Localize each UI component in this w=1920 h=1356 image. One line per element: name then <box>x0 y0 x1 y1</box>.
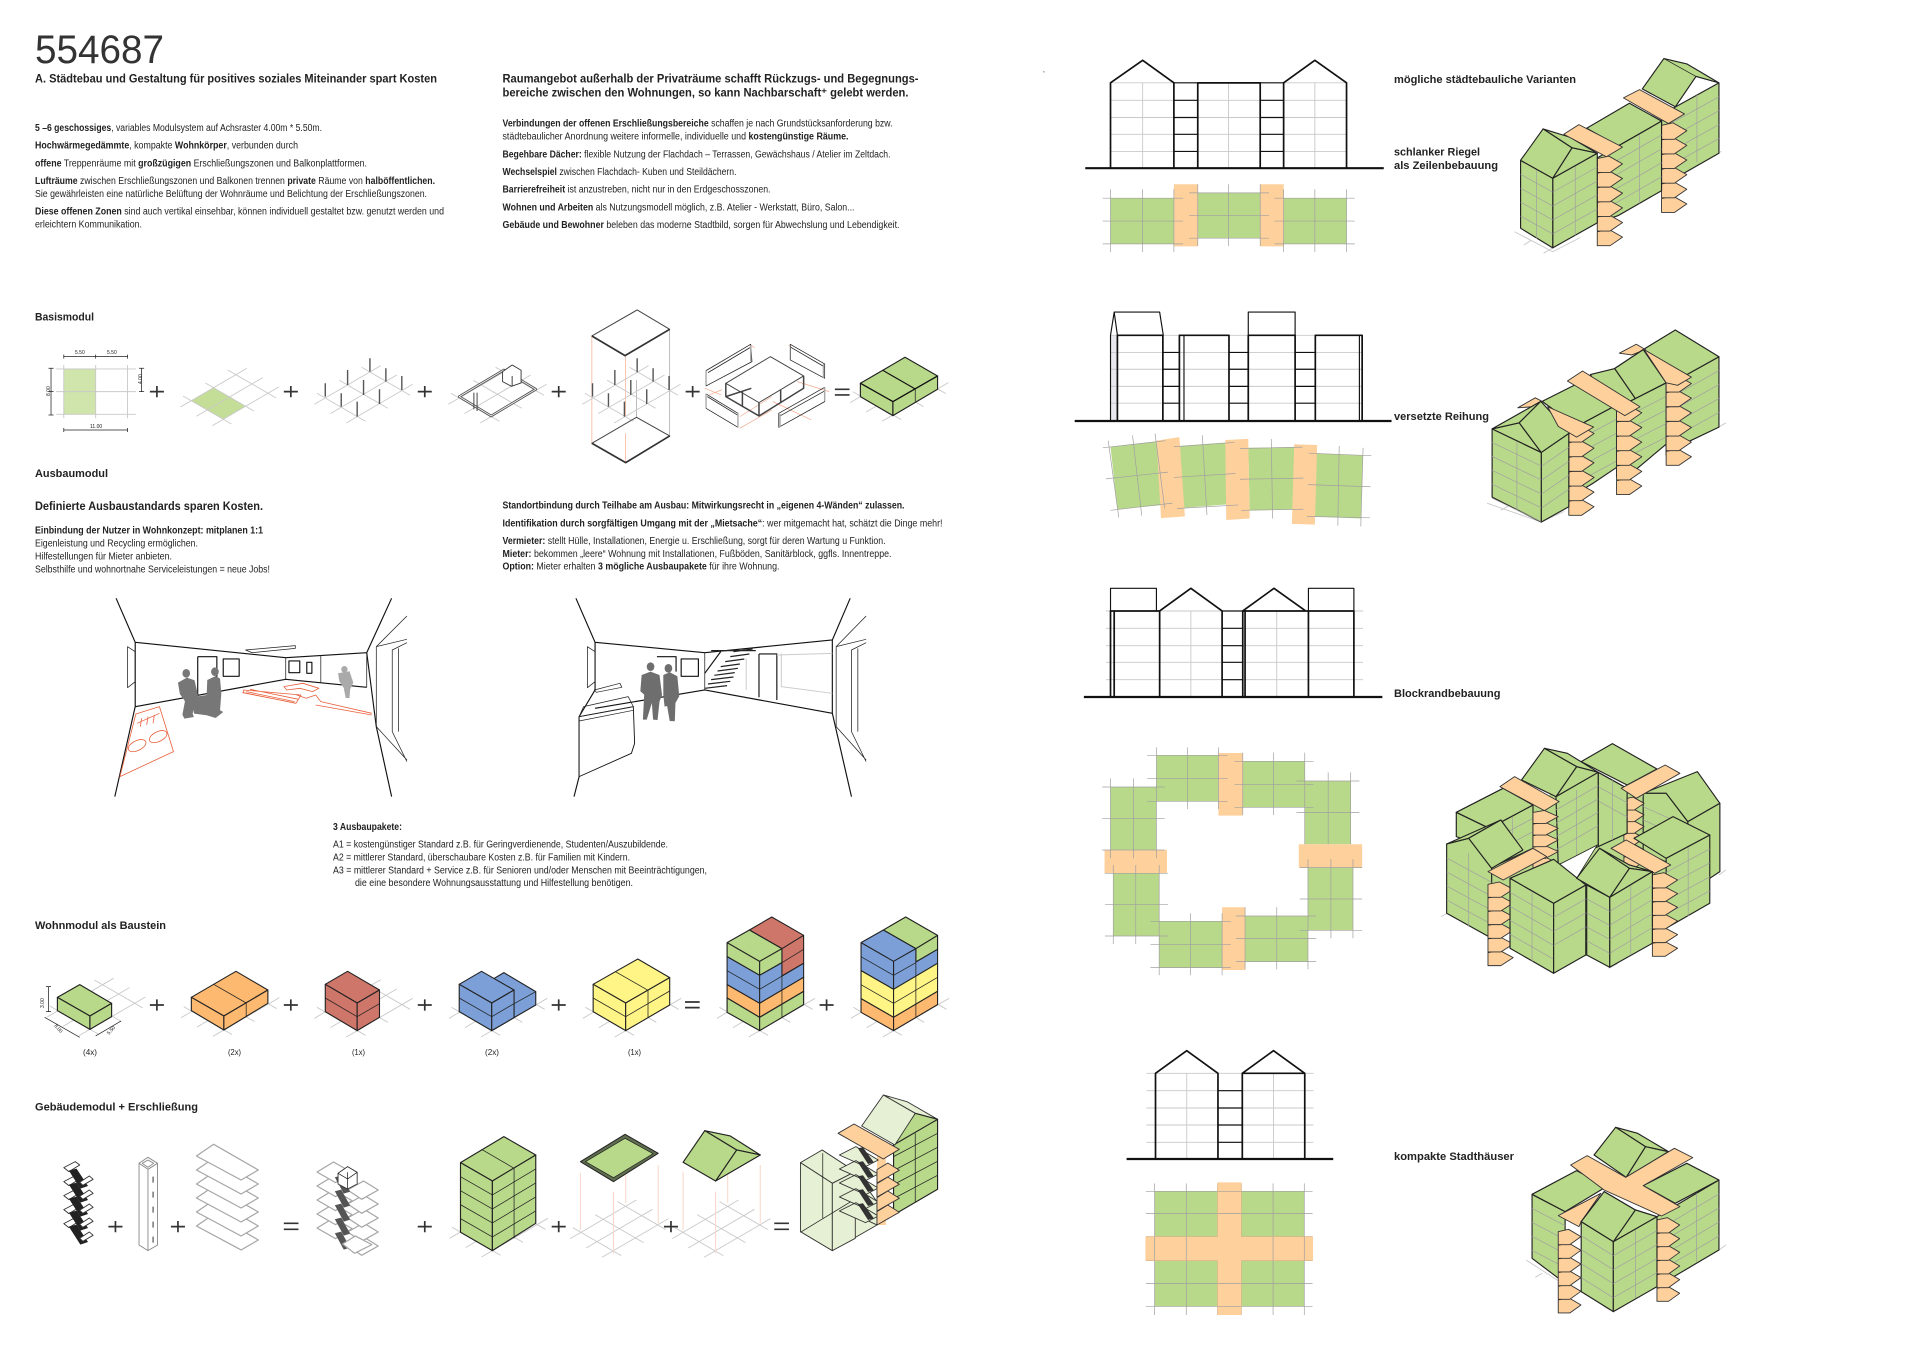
variant: kompakte Stadthäuser <box>1127 1051 1726 1315</box>
orange module 2x <box>181 971 279 1036</box>
equals sign <box>685 1002 700 1008</box>
plus sign <box>418 386 432 397</box>
axonometric <box>1441 744 1726 973</box>
variant: schlanker Riegel <box>1085 59 1721 253</box>
red module 1x <box>314 971 413 1037</box>
label: versetzte Reihung: versetzte Reihung <box>1394 411 1489 423</box>
title: 554687 <box>35 28 164 72</box>
text block: left concept: Lufträume zwischen Erschließungszonen und Balkonen trennen private Räume von halböffentlichen. <box>35 176 435 187</box>
heading: Städtebau: A. Städtebau und Gestaltung für positives soziales Miteinander spart Kosten <box>35 74 437 86</box>
dimension and count labels: 3.00 <box>40 998 46 1008</box>
plan <box>1103 434 1371 526</box>
plan <box>1102 747 1362 975</box>
plus sign <box>284 999 298 1011</box>
dimension labels: 4.00 <box>138 374 144 384</box>
diagram row: Basismodul <box>48 310 948 463</box>
text block: right concept <box>502 119 900 231</box>
text block: Einbindung der Nutzer: Selbsthilfe und wohnortnahe Serviceleistungen = neue Jobs! <box>35 564 270 575</box>
dimension and count labels: 5.50 <box>106 1025 117 1036</box>
iso grid with posts <box>314 358 413 423</box>
heading: Definierte Ausbaustandards: Definierte Ausbaustandards sparen Kosten. <box>35 499 263 513</box>
heading: Wohnmodul als Baustein: Wohnmodul als Baustein <box>35 920 166 932</box>
iso grid with green cell <box>180 368 279 426</box>
heading: Raumangebot: bereiche zwischen den Wohnungen, so kann Nachbarschaft⁺ gelebt werden. <box>502 88 908 100</box>
perspective interiors <box>115 598 866 797</box>
plus sign <box>171 1221 185 1232</box>
stacked building B <box>851 917 949 1037</box>
text block: left concept: Hochwärmegedämmte, kompakte Wohnkörper, verbunden durch <box>35 141 298 152</box>
text block: 3 Ausbaupakete: 3 Ausbaupakete: <box>333 822 402 833</box>
dimension and count labels <box>40 998 641 1057</box>
dimension and count labels: 8.00 <box>53 1023 64 1035</box>
access shaft <box>139 1157 158 1251</box>
text block: left concept <box>35 123 444 231</box>
elevation <box>1084 588 1382 697</box>
heading: Basismodul: Basismodul <box>35 312 94 324</box>
dimension labels: 11.00 <box>90 424 102 430</box>
text block: left concept: offene Treppenräume mit großzügigen Erschließungszonen und Balkonplattformen. <box>35 158 367 169</box>
dimension labels: 8.00 <box>46 386 52 396</box>
label: schlanker Riegel <box>1394 146 1498 172</box>
dimension and count labels: (1x) <box>352 1048 365 1057</box>
text block: Standortbindung: Option: Mieter erhalten 3 mögliche Ausbaupakete für ihre Wohnung. <box>502 562 780 573</box>
blue module 2x <box>449 971 547 1037</box>
heading: Raumangebot <box>502 74 919 100</box>
label: schlanker Riegel: als Zeilenbebauung <box>1394 160 1498 172</box>
text block: 3 Ausbaupakete <box>333 822 707 889</box>
text block: right concept: Gebäude und Bewohner beleben das moderne Stadtbild, sorgen für Abwechslung und Lebendigkeit. <box>502 220 900 231</box>
axonometric <box>1526 1127 1726 1313</box>
silhouettes <box>178 667 223 719</box>
label: mögliche städtebauliche Varianten: mögliche städtebauliche Varianten <box>1394 74 1576 86</box>
text block: Standortbindung: Mieter: bekommen „leere“ Wohnung mit Installationen, Fußböden, Sanitärblock, ggfls. Innentreppe. <box>502 549 892 560</box>
green tower <box>450 1137 548 1257</box>
heading: Gebäudemodul + Erschließung: Gebäudemodul + Erschließung <box>35 1102 198 1114</box>
heading: Ausbaumodul: Ausbaumodul <box>35 468 108 480</box>
plus sign <box>284 386 298 397</box>
plan <box>1145 1182 1313 1315</box>
exploded walls and box <box>705 344 829 428</box>
dimension and count labels: (4x) <box>83 1048 97 1057</box>
label: kompakte Stadthäuser: kompakte Stadthäuser <box>1394 1151 1515 1163</box>
elevation <box>1075 312 1392 421</box>
dimension and count labels: (2x) <box>485 1048 499 1057</box>
small registration mark <box>1043 71 1044 72</box>
text block: Standortbindung: Standortbindung durch Teilhabe am Ausbau: Mitwirkungsrecht in „eigenen 4-Wänden“ zulassen. <box>502 501 905 512</box>
text block: right concept: Wohnen und Arbeiten als Nutzungsmodell möglich, z.B. Atelier - Werkstatt, Büro, Salon... <box>502 202 854 213</box>
plus sign <box>552 1221 566 1232</box>
plus sign <box>552 999 566 1011</box>
dimension labels: 5.50 <box>75 350 85 356</box>
text block: right concept: Wechselspiel zwischen Flachdach- Kuben und Steildächern. <box>502 167 736 178</box>
dimension labels <box>46 350 144 430</box>
diagram row: Wohnmodul <box>45 917 949 1037</box>
equals sign <box>774 1223 789 1229</box>
plus sign <box>418 999 432 1011</box>
text block: Standortbindung <box>502 501 942 573</box>
axonometric <box>1487 330 1726 522</box>
heading: Raumangebot: Raumangebot außerhalb der Privaträume schafft Rückzugs- und Begegnungs- <box>502 74 919 86</box>
stacked building A <box>717 917 815 1037</box>
label: Blockrandbebauung: Blockrandbebauung <box>1394 688 1500 700</box>
text block: 3 Ausbaupakete: die eine besondere Wohnungsausstattung und Hilfestellung benötigen. <box>355 878 633 889</box>
text block: 3 Ausbaupakete: A2 = mittlerer Standard, überschaubare Kosten z.B. für Familien mit Kindern. <box>333 852 630 863</box>
plus sign <box>150 999 164 1011</box>
plan <box>1103 184 1355 252</box>
text block: Einbindung der Nutzer <box>35 526 270 575</box>
flat roof over grid <box>570 1134 668 1257</box>
label: schlanker Riegel: schlanker Riegel <box>1394 146 1480 158</box>
plan with dimensions <box>48 355 144 432</box>
dimension and count labels: (2x) <box>228 1048 241 1057</box>
kitchen <box>579 707 635 777</box>
equals sign <box>284 1223 298 1229</box>
axonometric <box>1515 59 1721 253</box>
text block: left concept: erleichtern Kommunikation. <box>35 220 142 231</box>
diagram row: Gebäudemodul <box>64 1095 938 1257</box>
plus sign <box>552 386 566 397</box>
pitched roof over grid <box>672 1131 770 1257</box>
exploded slabs and posts <box>582 310 681 463</box>
text block: right concept: Barrierefreiheit ist anzustreben, nicht nur in den Erdgeschosszonen. <box>502 185 770 196</box>
ground floor frame with core <box>448 365 547 423</box>
plus sign <box>820 999 834 1011</box>
stair flights <box>64 1162 93 1245</box>
text block: left concept: Sie gewährleisten eine natürliche Belüftung der Wohnräume und Belichtung der Erschließungszonen. <box>35 189 427 200</box>
plus sign <box>108 1221 122 1232</box>
variant: versetzte Reihung <box>1075 312 1726 526</box>
combined core <box>317 1162 378 1255</box>
text block: Einbindung der Nutzer: Eigenleistung und Recycling ermöglichen. <box>35 539 198 550</box>
text block: Einbindung der Nutzer: Einbindung der Nutzer in Wohnkonzept: mitplanen 1:1 <box>35 526 263 537</box>
text block: right concept: Begehbare Dächer: flexible Nutzung der Flachdach – Terrassen, Gewächshaus / Atelier im Zeltdach. <box>502 149 890 160</box>
green module result <box>850 357 948 421</box>
dimension labels: 5.50 <box>107 350 117 356</box>
plus sign <box>418 1221 432 1232</box>
silhouettes <box>640 662 679 721</box>
plus sign <box>664 1221 678 1232</box>
text block: Standortbindung: Vermieter: stellt Hülle, Installationen, Energie u. Erschließung, sorgt für deren Wartung u Funktion. <box>502 536 886 547</box>
orange floor services <box>242 683 372 715</box>
plus sign <box>686 386 700 397</box>
text block: right concept: städtebaulicher Anordnung weitere informelle, individuelle und kostengünstige Räume. <box>502 132 849 143</box>
equals sign <box>835 389 850 395</box>
text block: right concept: Verbindungen der offenen Erschließungsbereiche schaffen je nach Grundstücksanforderung bzw. <box>502 119 892 130</box>
text block: Standortbindung: Identifikation durch sorgfältigen Umgang mit der „Mietsache“: wer mitgemacht hat, schätzt die Dinge mehr! <box>502 518 942 529</box>
text block: Einbindung der Nutzer: Hilfestellungen für Mieter anbieten. <box>35 551 172 562</box>
interior sketch A2 <box>574 598 866 797</box>
elevation <box>1085 60 1384 168</box>
dimension and count labels: (1x) <box>628 1048 641 1057</box>
interior sketch A1 <box>115 598 407 797</box>
assembled building <box>800 1095 938 1251</box>
text block: left concept: Diese offenen Zonen sind auch vertikal einsehbar, können individuell gestaltet bzw. genutzt werden und <box>35 207 444 218</box>
elevation <box>1127 1051 1333 1159</box>
text block: 3 Ausbaupakete: A1 = kostengünstiger Standard z.B. für Geringverdienende, Studenten/Auszubildende. <box>333 840 668 851</box>
text block: left concept: 5 –6 geschossiges, variables Modulsystem auf Achsraster 4.00m * 5.50m. <box>35 123 322 134</box>
plus sign <box>150 386 164 397</box>
yellow module 1x <box>583 959 681 1037</box>
stair <box>705 649 756 688</box>
green module 4x <box>45 978 145 1037</box>
stacked slabs <box>196 1144 258 1250</box>
variant: Blockrandbebauung <box>1084 588 1726 975</box>
text block: 3 Ausbaupakete: A3 = mittlerer Standard + Service z.B. für Senioren und/oder Menschen mit Beeinträchtigungen, <box>333 865 707 876</box>
